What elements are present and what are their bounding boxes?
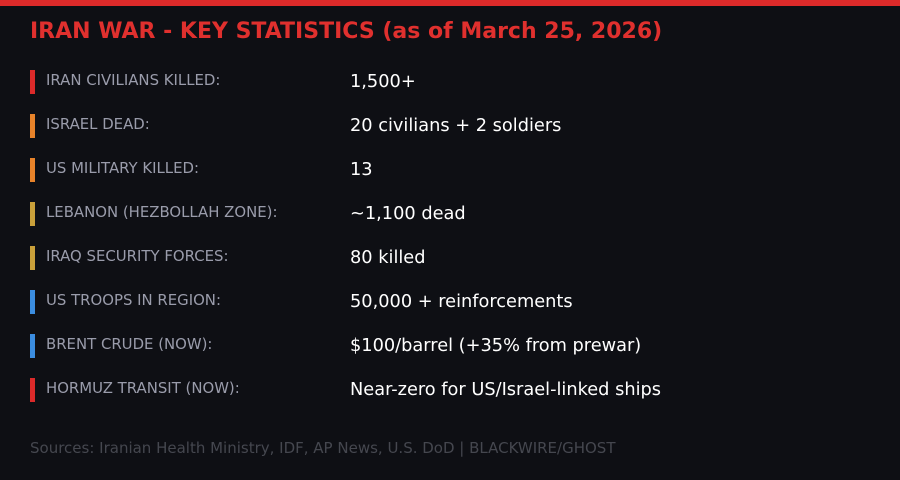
top accent bar [0,0,900,6]
row: us troops: US TROOPS IN REGION: [46,291,221,309]
row: brent crude [30,334,641,358]
row: hormuz: Near-zero for US/Israel-linked ships [350,380,661,400]
row: brent crude: $100/barrel (+35% from prewar) [350,336,641,356]
row: us troops: 50,000 + reinforcements [350,292,573,312]
title: IRAN WAR - KEY STATISTICS (as of March 25, 2026) [30,19,662,44]
row: lebanon: LEBANON (HEZBOLLAH ZONE): [46,203,277,221]
row: iraq: IRAQ SECURITY FORCES: [46,247,228,265]
row: lebanon: ~1,100 dead [350,204,466,224]
row: us military: US MILITARY KILLED: [46,159,199,177]
row: iraq: 80 killed [350,248,426,268]
row: hormuz [30,378,661,402]
row: iran civilians: IRAN CIVILIANS KILLED: [46,71,220,89]
sources: Sources: Iranian Health Ministry, IDF, AP News, U.S. DoD | BLACKWIRE/GHOST [30,439,615,457]
row: israel dead [30,114,561,138]
row: hormuz: HORMUZ TRANSIT (NOW): [46,379,240,397]
row: israel dead: ISRAEL DEAD: [46,115,150,133]
row: iran civilians: 1,500+ [350,72,416,92]
row: us troops [30,290,573,314]
row: israel dead: 20 civilians + 2 soldiers [350,116,561,136]
row: us military: 13 [350,160,373,180]
row: brent crude: BRENT CRUDE (NOW): [46,335,212,353]
row: us military [30,158,373,182]
row: iraq [30,246,426,270]
row: lebanon [30,202,466,226]
row: iran civilians [30,70,416,94]
